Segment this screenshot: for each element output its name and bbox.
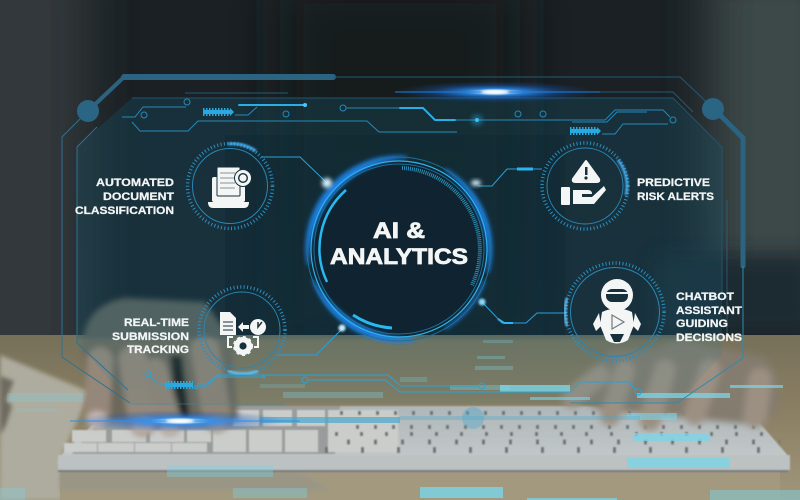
central title: AI & [373,218,425,243]
node: real-time submission tracking [112,287,285,374]
label: AUTOMATED [96,177,174,189]
node: automated document classification [75,144,272,228]
top and bottom lens flares [70,81,600,432]
label: RISK ALERTS [637,191,714,203]
arrow chevrons [165,108,601,385]
bright circuit dashes [239,105,455,120]
node: predictive risk alerts [542,143,714,229]
central title [330,218,468,269]
node: chatbot assistant [565,263,742,361]
label: CLASSIFICATION [75,205,174,217]
label: GUIDING [676,318,728,330]
label: PREDICTIVE [637,177,710,189]
label: CHATBOT [676,291,734,303]
label [676,291,742,344]
icon: warning on hand [561,161,606,205]
label: REAL-TIME [124,317,189,329]
icon: robot [593,279,641,344]
hand: left [82,298,238,435]
connector lines [262,157,567,355]
label [112,317,189,356]
keyboard [58,406,790,472]
top circuit lines [122,99,676,134]
hand: right [570,340,778,425]
light streak bars [0,340,800,500]
HUD panel tint [77,98,722,403]
label [75,177,174,217]
central circle [307,157,491,341]
label: ASSISTANT [676,305,742,317]
label: SUBMISSION [112,331,189,343]
HUD nodes [77,98,724,122]
centre dark tint [225,135,565,335]
central title: ANALYTICS [330,244,468,269]
icon: document, clock and gear [220,312,266,355]
HUD frame [62,77,743,404]
label: DOCUMENT [103,191,174,203]
label [637,177,714,203]
mouse [0,376,14,435]
icon: laptop with document and gear [208,167,252,208]
bottom circuit lines [145,371,641,395]
label: TRACKING [127,344,189,356]
paper on desk [0,355,90,500]
label: DECISIONS [676,332,742,344]
